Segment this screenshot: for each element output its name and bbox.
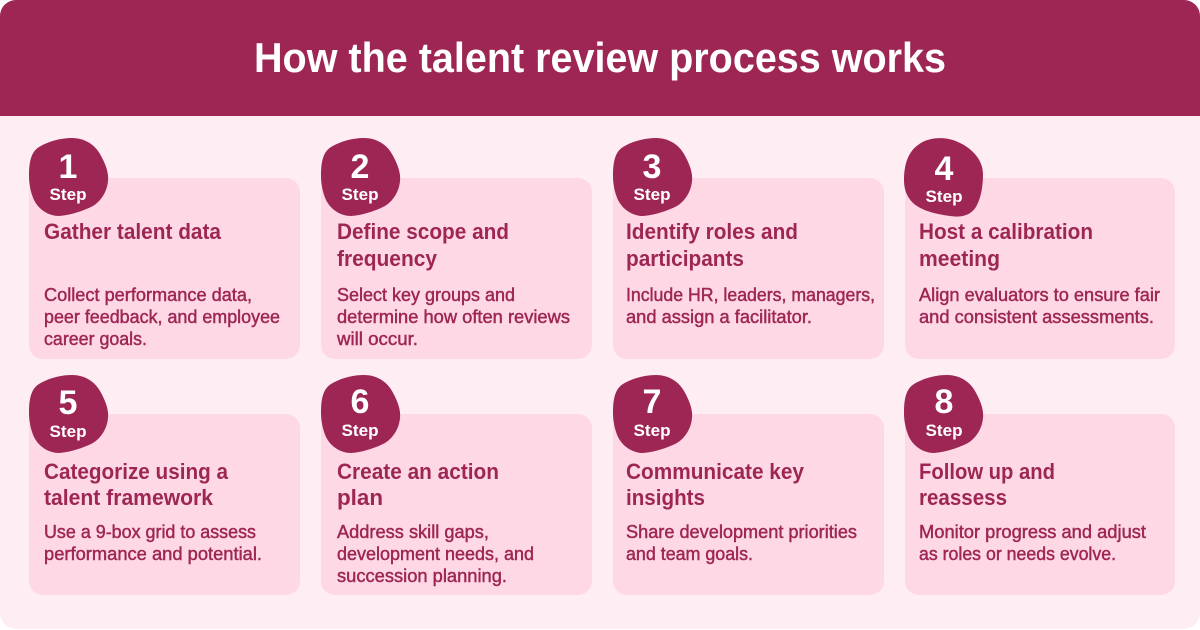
description: step 8 [919,522,1146,564]
badge: step 1 [29,138,108,216]
badge: step 7: 7 [643,383,661,421]
title: How the talent review process works [254,34,946,81]
heading: step 8: reassess [919,485,1007,510]
header banner [0,0,1200,116]
badge: step 6 [321,375,400,453]
badge: step 4: Step [926,187,962,206]
heading: step 5 [44,459,229,510]
description: step 3 [626,285,875,327]
description: step 1: Collect performance data, [44,285,252,305]
panel: step 3 [613,138,884,359]
heading: step 2: Define scope and [337,219,509,244]
heading: step 8: Follow up and [919,459,1055,484]
badge: step 5: 5 [59,384,77,422]
heading: step 7: insights [626,485,705,510]
badge: step 2: Step [342,185,378,204]
badge: step 3: Step [634,185,670,204]
description: step 3: Include HR, leaders, managers, [626,285,875,305]
heading: step 4: meeting [919,246,1000,271]
heading: step 2 [337,219,509,271]
description: step 1 [44,285,280,349]
heading: step 1: Gather talent data [44,219,222,244]
heading: step 4 [919,219,1093,271]
panel: step 8 [904,375,1175,595]
description: step 4: and consistent assessments. [919,307,1154,327]
badge: step 3 [613,138,692,216]
description: step 2: Select key groups and [337,285,515,305]
badge: step 4: 4 [935,150,954,188]
badge: step 2 [321,138,400,216]
description: step 6: Address skill gaps, [337,522,489,542]
description: step 1: peer feedback, and employee [44,307,280,327]
heading: step 6 [337,459,499,510]
panel: step 6 [321,375,592,595]
badge: step 8 [904,375,983,453]
badge: step 4 [904,138,983,217]
description: step 7: Share development priorities [626,522,857,542]
heading: step 4: Host a calibration [919,219,1093,244]
badge: step 6: 6 [351,383,369,421]
panel: step 5 [29,375,300,595]
heading: step 2: frequency [337,246,438,271]
panel: step 1 [29,138,300,359]
description: step 2 [336,285,570,349]
badge: step 3: 3 [643,148,661,186]
heading: step 7: Communicate key [626,459,805,484]
badge: step 8: Step [926,421,962,440]
badge: step 1: Step [50,185,86,204]
description: step 8: Monitor progress and adjust [919,522,1146,542]
panel: step 2 [321,138,592,359]
description: step 8: as roles or needs evolve. [919,544,1116,564]
description: step 4 [919,285,1160,327]
description: step 6 [337,522,534,586]
description: step 2: determine how often reviews [337,307,570,327]
description: step 7 [626,522,857,564]
heading: step 3: participants [626,246,744,271]
description: step 5: Use a 9-box grid to assess [44,522,256,542]
description: step 1: career goals. [44,329,147,349]
badge: step 5 [29,375,108,453]
heading: step 6: Create an action [337,459,499,484]
heading: step 6: plan [337,485,383,510]
panel: step 7 [613,375,884,595]
badge: step 1: 1 [59,148,77,186]
badge: step 2: 2 [351,148,369,186]
description: step 4: Align evaluators to ensure fair [919,285,1160,305]
description: step 5: performance and potential. [44,544,262,564]
description: step 7: and team goals. [626,544,753,564]
description: step 6: succession planning. [337,566,507,586]
badge: step 6: Step [342,421,378,440]
heading: step 7 [626,459,805,510]
heading: step 5: talent framework [44,485,214,510]
description: step 5 [44,522,262,564]
badge: step 7: Step [634,421,670,440]
panel: step 4 [904,138,1175,359]
description: step 2: will occur. [336,329,418,349]
description: step 6: development needs, and [337,544,534,564]
heading: step 8 [919,459,1055,510]
heading: step 3 [626,219,798,271]
badge: step 7 [613,375,692,453]
badge: step 8: 8 [935,383,953,421]
heading: step 3: Identify roles and [626,219,798,244]
badge: step 5: Step [50,422,86,441]
heading: step 5: Categorize using a [44,459,229,484]
description: step 3: and assign a facilitator. [626,307,812,327]
